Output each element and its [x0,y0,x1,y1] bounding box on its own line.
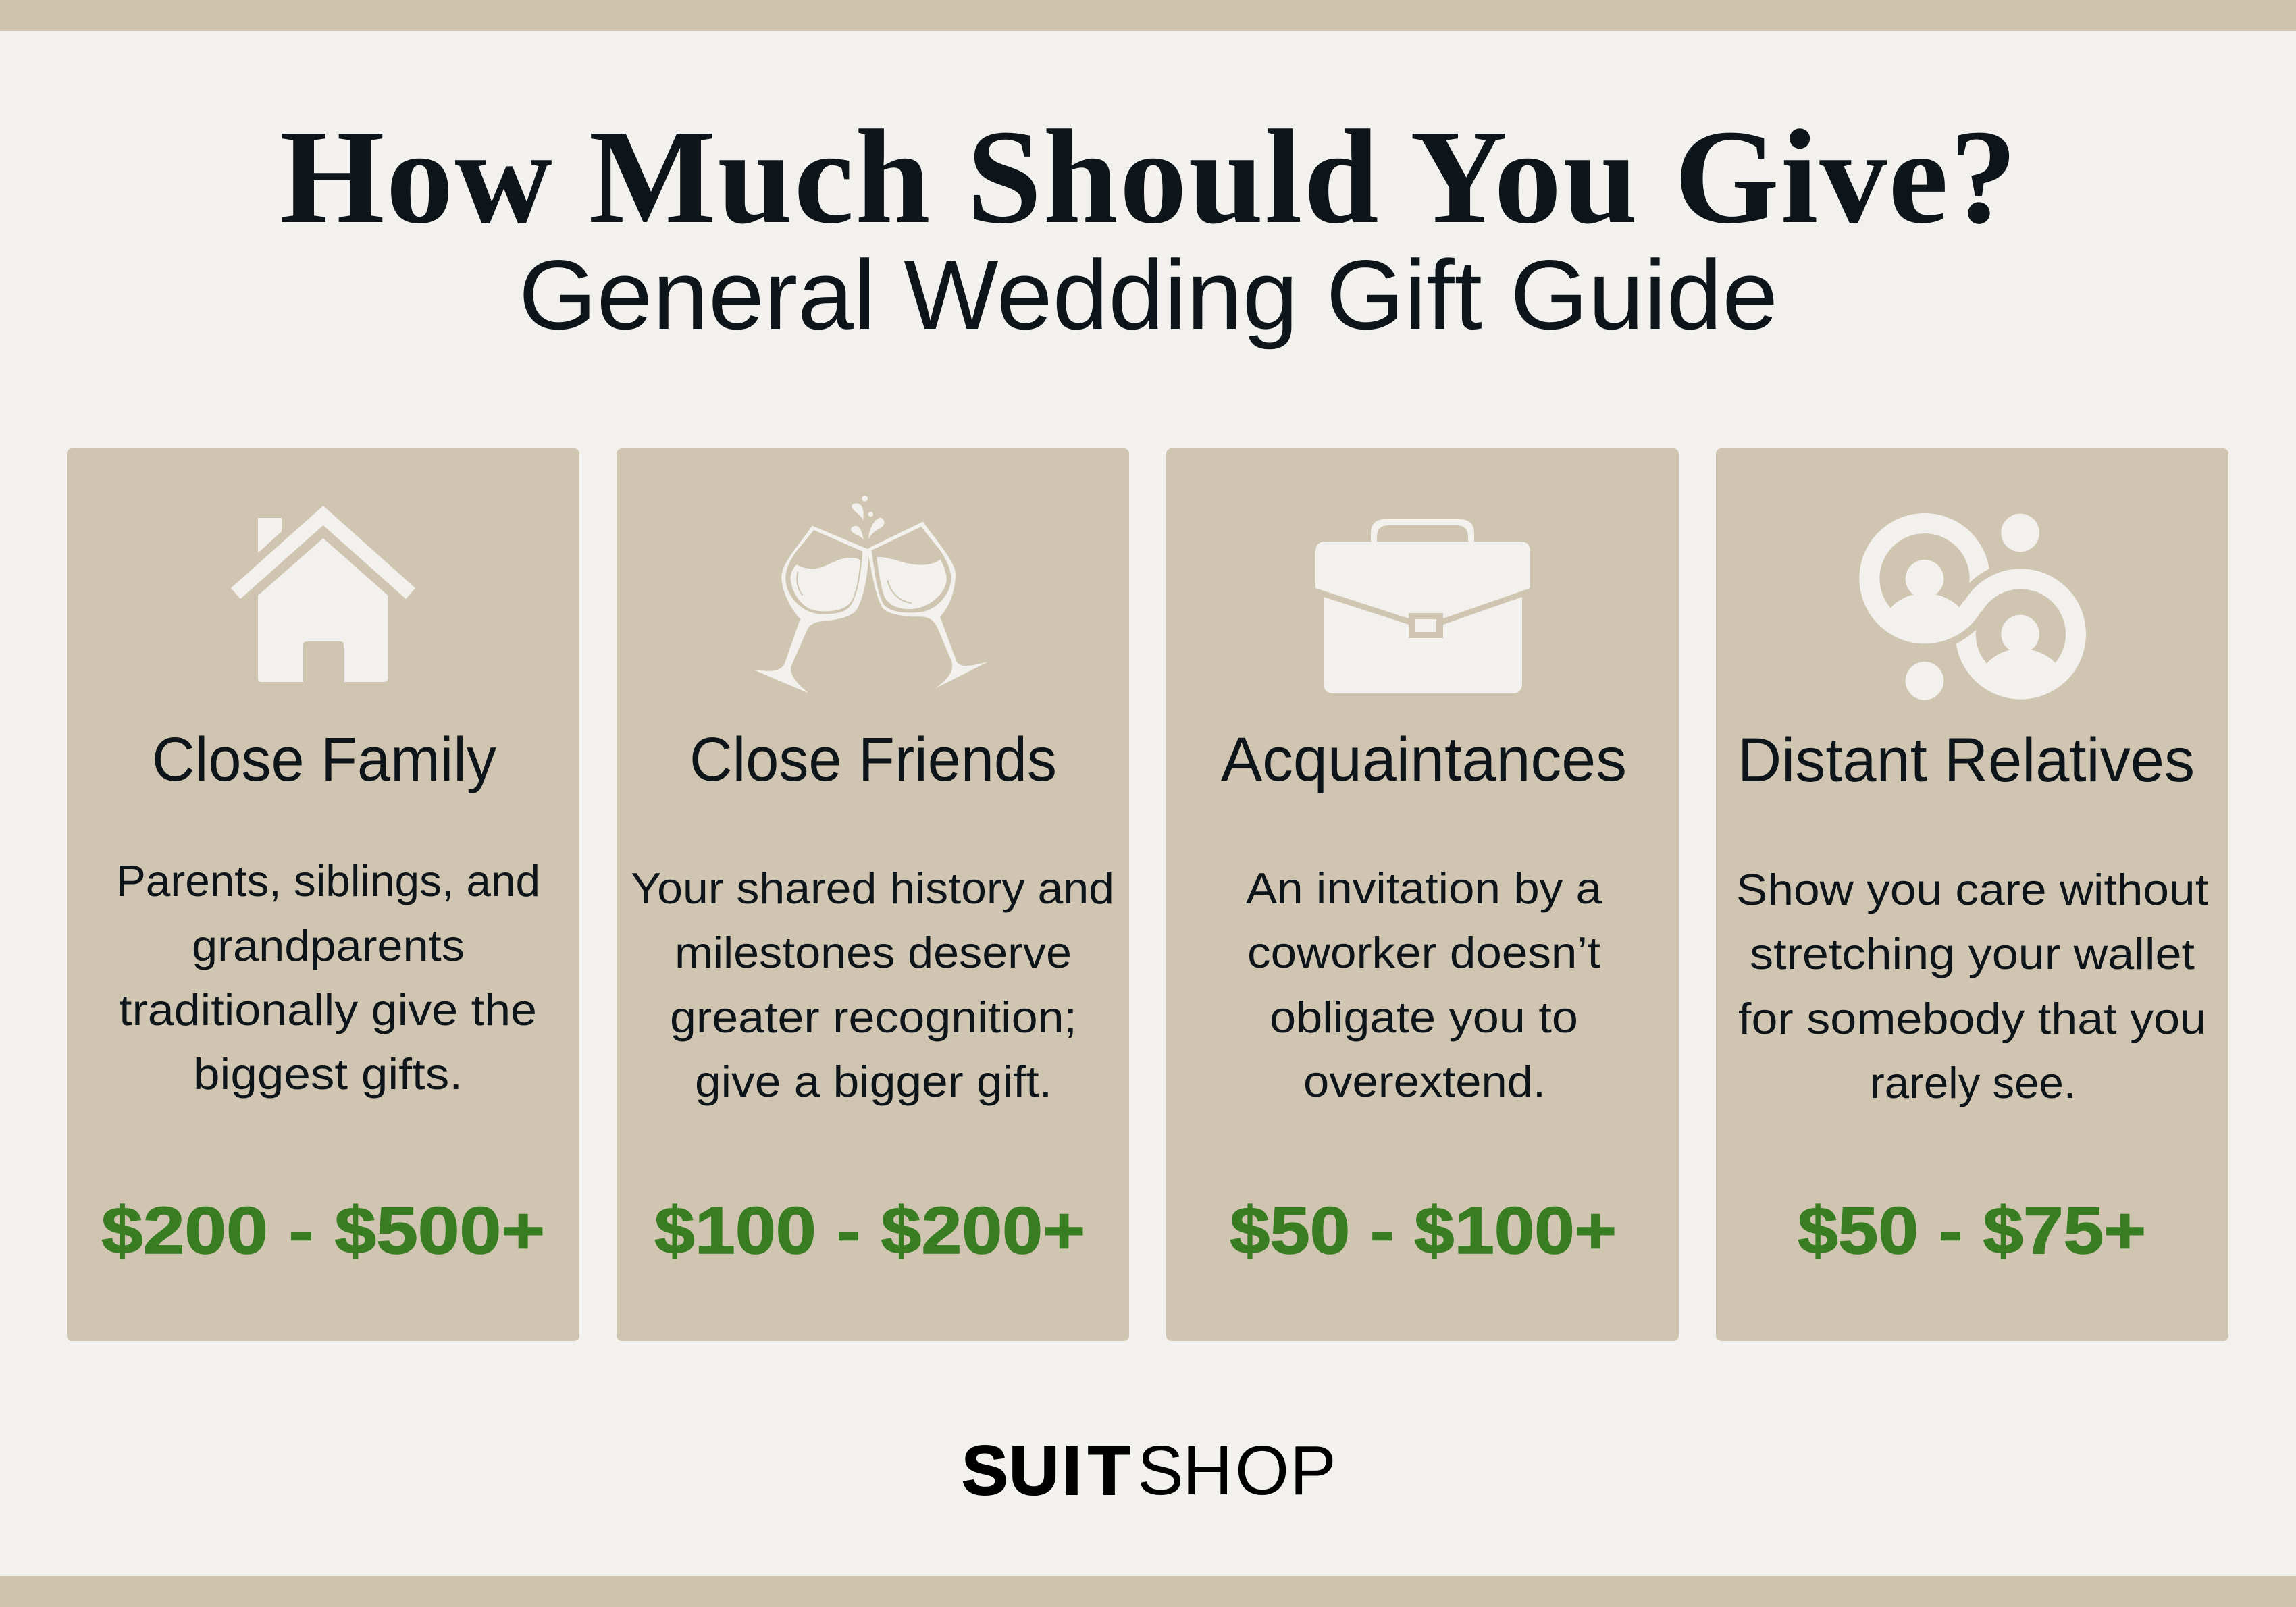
description: acquaintances: obligate you to [1270,993,1578,1042]
description: distant relatives: rarely see. [1870,1058,2076,1107]
description: close family [116,856,540,1099]
price: close family: $200 - $500+ [101,1193,545,1267]
description: distant relatives: for somebody that you [1738,994,2206,1043]
heading: acquaintances: Acquaintances [1221,725,1627,794]
description: close family: grandparents [192,921,465,970]
description: close friends: Your shared history and [631,864,1114,913]
description: close family: biggest gifts. [193,1049,463,1099]
logo: suitshop: SHOP [1137,1431,1336,1509]
panel: close friends [617,448,1129,1341]
heading: distant relatives: Distant Relatives [1738,726,2195,795]
icon: briefcase [1315,519,1530,693]
top band [0,0,2296,31]
description: close family: traditionally give the [119,985,537,1034]
price: acquaintances: $50 - $100+ [1230,1193,1617,1267]
logo: suitshop [962,1431,1336,1509]
description: close friends [631,864,1114,1106]
panel: close family [67,448,579,1341]
description: close friends: give a bigger gift. [695,1057,1052,1106]
description: close family: Parents, siblings, and [116,856,540,905]
panel: distant relatives [1716,448,2228,1341]
heading: close friends: Close Friends [689,725,1057,794]
description: close friends: greater recognition; [670,993,1077,1042]
description: acquaintances: overextend. [1303,1057,1546,1106]
icon: clinking wine glasses [753,496,988,693]
description: acquaintances: An invitation by a [1246,864,1602,913]
logo: suitshop: SUIT [962,1431,1130,1509]
title: How Much Should You Give? [280,103,2017,252]
subtitle: General Wedding Gift Guide [519,240,1778,350]
description: distant relatives: Show you care without [1736,865,2208,914]
icon: house [231,506,415,682]
description: acquaintances [1246,864,1602,1106]
icon: linked people [1859,513,2086,700]
description: close friends: milestones deserve [675,928,1072,977]
price: close friends: $100 - $200+ [654,1193,1085,1267]
bottom band [0,1576,2296,1607]
price: distant relatives: $50 - $75+ [1798,1193,2146,1267]
description: distant relatives [1736,865,2208,1107]
panel: acquaintances [1166,448,1679,1341]
heading: close family: Close Family [152,725,496,794]
description: acquaintances: coworker doesn’t [1247,928,1600,977]
description: distant relatives: stretching your wallet [1750,929,2195,978]
